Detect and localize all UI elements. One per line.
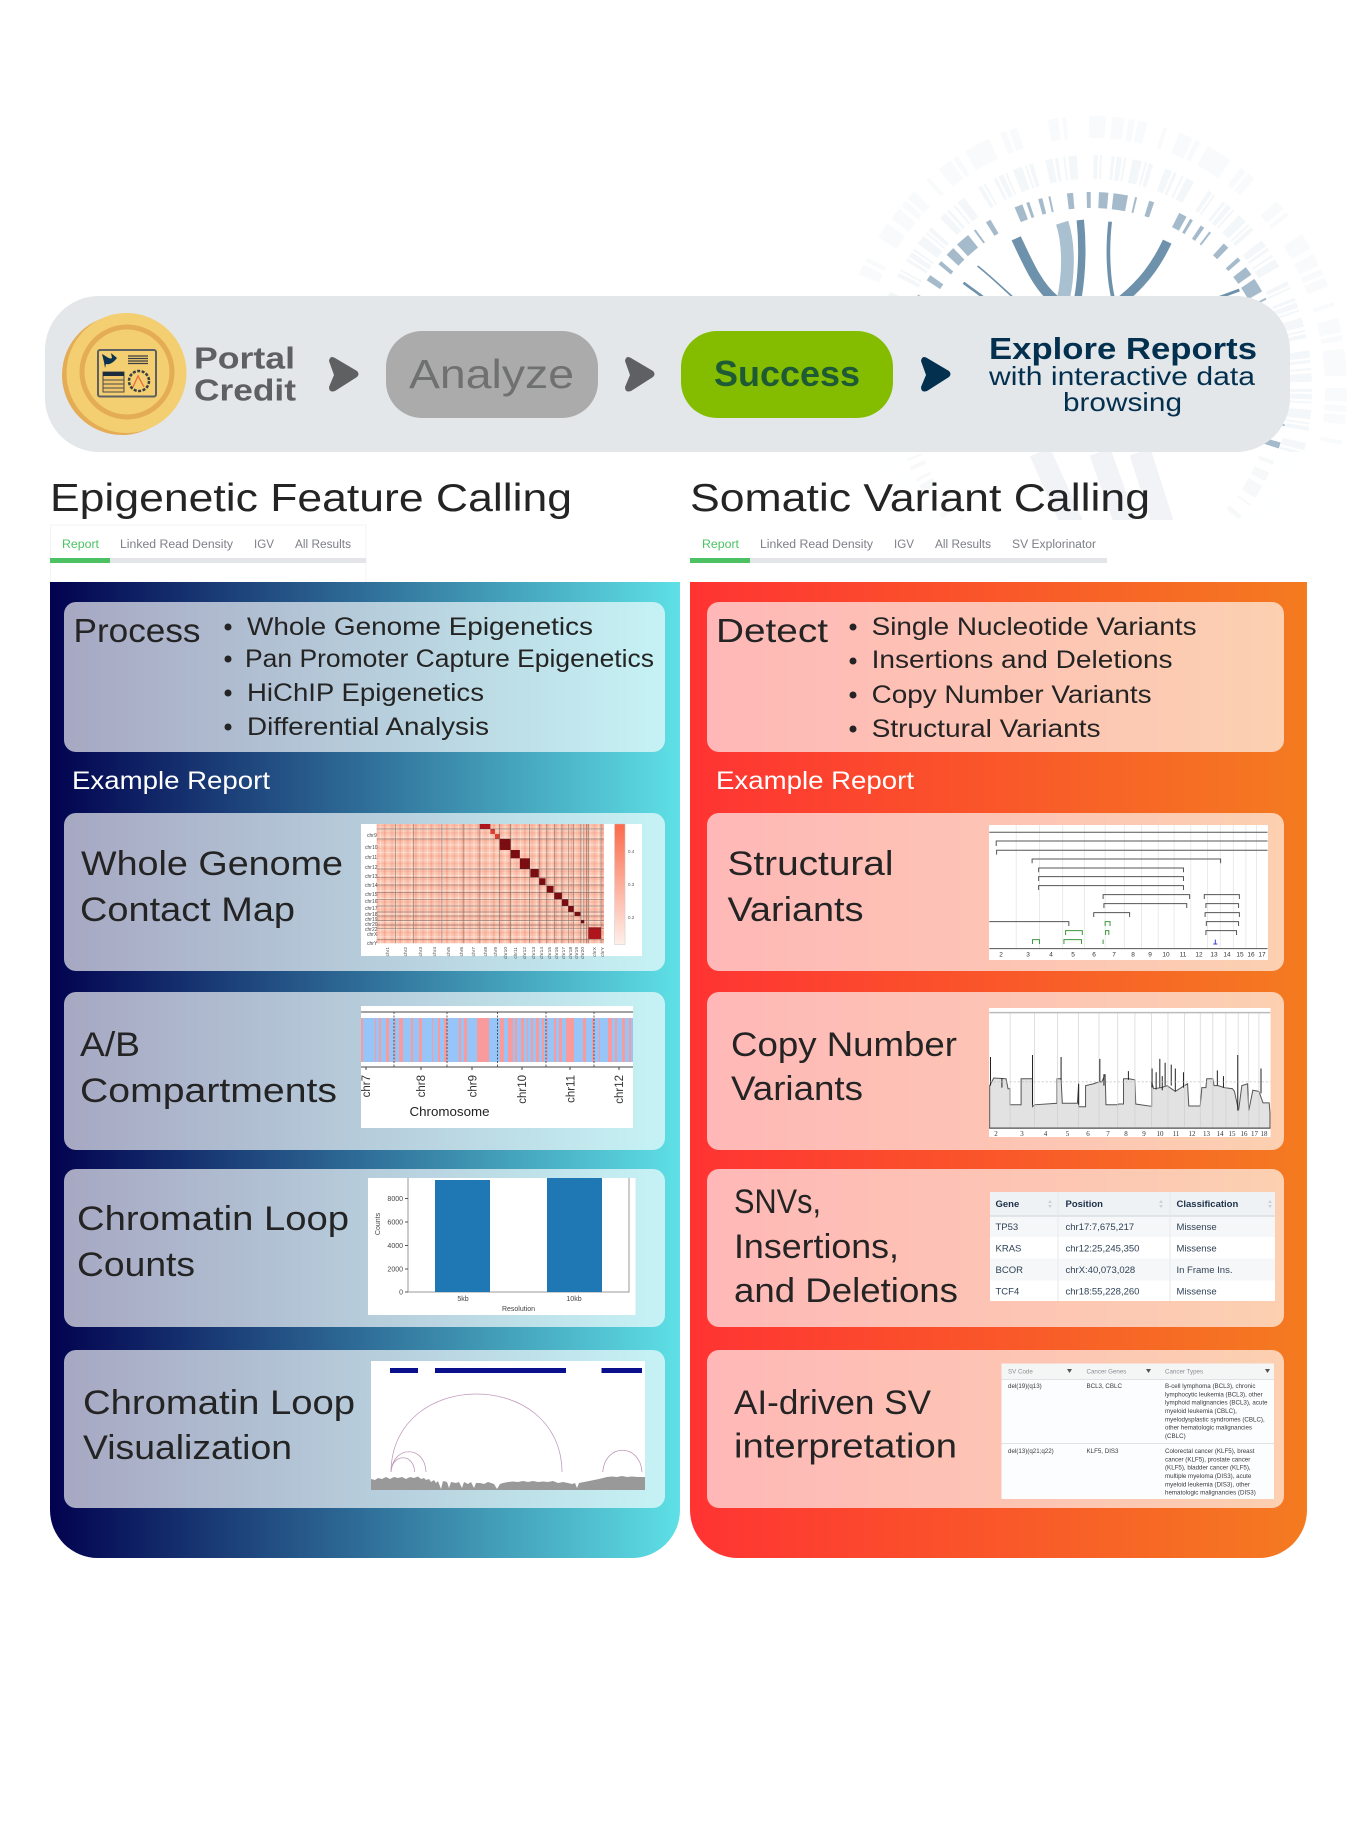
x-axis chromosome labels: chr19 (574, 947, 580, 959)
x-axis chromosome labels: chr1 (385, 947, 391, 956)
label: example report: Example Report (72, 767, 270, 795)
chart: contact map heatmap: chr11 (365, 855, 377, 861)
step: Success: Success (714, 353, 860, 394)
x-axis chromosome labels: chr16 (554, 947, 560, 959)
label: example report: Example Report (716, 767, 914, 795)
card: process (64, 602, 665, 752)
table: variants: chr18:55,228,260 (1066, 1286, 1139, 1298)
x-axis chromosome labels: chr14 (539, 947, 545, 959)
chart: loop count bars: 10kb (566, 1296, 582, 1303)
chart: structural variant brackets: 17 (1258, 952, 1266, 958)
card: process: HiChIP Epigenetics (247, 679, 484, 707)
table: SV interpretation: myeloid leukemia (CBLC), (1165, 1408, 1237, 1415)
chart: A/B compartment strip: Chromosome (410, 1104, 490, 1119)
table: SV interpretation: (KLF5), bladder cancer (KLF5), (1165, 1465, 1251, 1472)
chart: A/B compartment strip: chr12 (614, 1075, 626, 1104)
table: variants: chr17:7,675,217 (1066, 1222, 1134, 1233)
chart: copy number profile: 4 (1044, 1130, 1048, 1138)
x-axis chromosome labels (385, 946, 606, 959)
chart: contact map heatmap: chr15 (365, 892, 378, 898)
chart: loop count bars: 0 (399, 1290, 403, 1296)
x-axis chromosome labels: chr2 (403, 947, 409, 956)
chart: copy number profile: 18 (1260, 1130, 1268, 1138)
table: variants: Missense (1176, 1244, 1217, 1254)
tabs: somatic report: Linked Read Density (760, 539, 873, 551)
chart: copy number profile: 15 (1228, 1130, 1236, 1138)
chart: loop arcs (371, 1361, 645, 1490)
card: process: Whole Genome Epigenetics (247, 613, 593, 641)
chart: contact map heatmap: chrY (367, 941, 378, 947)
chart: structural variant brackets: 11 (1180, 952, 1187, 958)
chart: contact map heatmap: chr20 (365, 922, 378, 928)
tabs: somatic report: IGV (894, 539, 914, 551)
table: SV interpretation: myeloid leukemia (DIS3), other (1165, 1481, 1250, 1488)
table: SV interpretation: SV Code (1008, 1368, 1033, 1376)
card: detect: Detect (716, 612, 828, 649)
card: whole genome contact map: Contact Map (80, 891, 295, 929)
card: AI-driven SV interpretation (707, 1350, 1284, 1508)
chart: contact map heatmap: chr10 (365, 845, 378, 851)
fade below bar (690, 452, 1366, 582)
card: AI-driven SV interpretation: interpretation (734, 1428, 957, 1466)
label: Portal Credit: Portal (194, 340, 295, 376)
card: detect: Single Nucleotide Variants (872, 613, 1197, 641)
table: SV interpretation: hematologic malignancies (DIS3) (1165, 1490, 1256, 1497)
x-axis chromosome labels: chr11 (513, 947, 519, 959)
chart: copy number profile: 3 (1020, 1130, 1024, 1138)
chart: contact map heatmap: chrX (367, 932, 378, 938)
x-axis chromosome labels: chr17 (561, 947, 567, 959)
x-axis chromosome labels: chrX (592, 946, 598, 957)
chart: copy number profile: 14 (1216, 1130, 1224, 1138)
panel: epigenetic feature calling (50, 582, 680, 1558)
table: SV interpretation: Colorectal cancer (KLF5), breast (1165, 1448, 1255, 1455)
table: variants: TCF4 (996, 1286, 1019, 1298)
chart: copy number profile: 8 (1124, 1130, 1128, 1138)
card: copy number variants (707, 992, 1284, 1150)
table: variants: In Frame Ins. (1176, 1265, 1232, 1276)
chart: loop count bars: 5kb (457, 1296, 469, 1303)
table: SV interpretation: Cancer Types (1165, 1368, 1203, 1376)
card: whole genome contact map (64, 813, 665, 971)
chart: structural variant brackets: 3 (1026, 952, 1030, 958)
tabs: epigenetic report: All Results (295, 539, 351, 551)
chart: structural variant brackets: 12 (1195, 952, 1203, 958)
x-axis chromosome labels: chr10 (503, 947, 509, 959)
table: SV interpretation: multiple myeloma (DIS3), acute (1165, 1473, 1252, 1480)
table: variants: chr12:25,245,350 (1066, 1244, 1139, 1254)
table: variants: Gene (996, 1199, 1019, 1210)
x-axis chromosome labels: chr12 (522, 947, 528, 959)
table: variants: chrX:40,073,028 (1066, 1265, 1135, 1276)
chart: copy number profile: 11 (1173, 1130, 1180, 1138)
step: Analyze (386, 331, 598, 418)
text: Explore Reports (988, 331, 1257, 417)
card: A/B compartments: Compartments (80, 1072, 337, 1110)
chart: contact map heatmap: chr17 (365, 906, 378, 912)
table: variants: BCOR (996, 1265, 1023, 1276)
card: structural variants: Structural (728, 845, 894, 883)
arrow 2 (625, 357, 654, 392)
chart: structural variant brackets: 16 (1247, 952, 1255, 958)
card: SNVs, insertions and deletions: Insertions, (734, 1228, 899, 1266)
chart: loop count bars: Resolution (502, 1306, 535, 1313)
card: copy number variants: Variants (731, 1070, 863, 1108)
tabs: epigenetic report (50, 525, 366, 585)
card: detect (707, 602, 1284, 752)
chart: structural variant brackets: 13 (1210, 952, 1218, 958)
chart: contact map heatmap: chr13 (365, 874, 378, 880)
step: Success (681, 331, 893, 418)
card: SNVs, insertions and deletions: SNVs, (734, 1183, 821, 1221)
x-axis chromosome labels: chr15 (547, 947, 553, 959)
x-axis chromosome labels: chr4 (432, 947, 438, 956)
table: SV interpretation: other hematologic malignancies (1165, 1425, 1252, 1432)
card: SNVs, insertions and deletions (707, 1169, 1284, 1327)
tabs: epigenetic report: IGV (254, 539, 274, 551)
x-axis chromosome labels: chr3 (418, 947, 424, 956)
card: copy number variants: Copy Number (731, 1026, 957, 1064)
table: SV interpretation: cancer (KLF5), prostate cancer (1165, 1456, 1250, 1463)
card: chromatin loop visualization: Visualization (83, 1429, 292, 1467)
card: chromatin loop visualization: Chromatin Loop (83, 1384, 355, 1422)
tabs: epigenetic report: Linked Read Density (120, 539, 233, 551)
text: Explore Reports: Explore Reports (989, 331, 1257, 366)
heading: Epigenetic Feature Calling: Epigenetic Feature Calling (50, 477, 572, 520)
chart: contact map heatmap: chr12 (365, 865, 378, 871)
chord ribbons (964, 220, 1239, 300)
chart: contact map heatmap: chr19 (365, 917, 378, 923)
circos background graphic (690, 127, 1366, 651)
arrow 1 (329, 357, 358, 392)
chart: copy number profile: 6 (1086, 1130, 1090, 1138)
chart: copy number profile: 5 (1066, 1130, 1070, 1138)
table: SV interpretation (1002, 1364, 1274, 1499)
colorbar ticks: 0.2 (628, 915, 635, 920)
x-axis chromosome labels: chr20 (580, 947, 586, 959)
chart: loop count bars: 2000 (387, 1266, 403, 1274)
table: SV interpretation: del(19)(q13) (1008, 1383, 1042, 1390)
step: Analyze: Analyze (409, 351, 574, 397)
chart: structural variant brackets: 7 (1112, 952, 1116, 958)
table: SV interpretation: BCL3, CBLC (1086, 1383, 1122, 1390)
card: A/B compartments: A/B (80, 1026, 140, 1064)
text: Explore Reports: with interactive data (988, 361, 1256, 391)
chart: copy number profile: 17 (1251, 1130, 1258, 1138)
chart: loop count bars: 6000 (387, 1220, 403, 1226)
chart: structural variant brackets: 6 (1092, 952, 1096, 958)
card: AI-driven SV interpretation: AI-driven SV (734, 1384, 931, 1422)
card: detect: Insertions and Deletions (872, 646, 1173, 674)
x-axis chromosome labels: chr5 (446, 947, 452, 956)
card: structural variants: Variants (728, 891, 864, 929)
icon: portal credit coin (62, 313, 186, 435)
colorbar ticks (628, 849, 635, 920)
x-axis chromosome labels: chr13 (531, 947, 537, 959)
chart: structural variant brackets (989, 825, 1268, 960)
chart: copy number profile: 9 (1142, 1130, 1146, 1138)
chart: structural variant brackets: 2 (999, 952, 1003, 958)
chart: loop count bars: Counts (375, 1212, 382, 1235)
process flow bar (45, 296, 1290, 452)
x-axis chromosome labels: chr7 (471, 947, 477, 956)
heading: Somatic Variant Calling: Somatic Variant Calling (690, 477, 1150, 520)
chart: structural variant brackets: 4 (1049, 952, 1053, 958)
chart: copy number profile: 13 (1203, 1130, 1210, 1138)
card: chromatin loop counts (64, 1169, 665, 1327)
chart: copy number profile: 16 (1240, 1130, 1248, 1138)
chart: A/B compartment strip (361, 1006, 633, 1128)
card: chromatin loop visualization (64, 1350, 665, 1508)
chart: contact map heatmap: chr16 (365, 899, 378, 905)
tabs: somatic report: SV Explorinator (1012, 539, 1096, 551)
chart: copy number profile: 7 (1106, 1130, 1110, 1138)
card: SNVs, insertions and deletions: and Deletions (734, 1272, 958, 1310)
chart: loop count bars (368, 1178, 636, 1315)
chart: contact map heatmap: chr14 (365, 883, 378, 889)
card: detect: Structural Variants (872, 715, 1101, 743)
x-axis chromosome labels: chr9 (493, 947, 499, 956)
panel: somatic variant calling (690, 582, 1307, 1558)
chart: A/B compartment strip: chr8 (416, 1075, 428, 1097)
chart: A/B compartment strip: chr9 (468, 1075, 480, 1097)
text: Explore Reports: browsing (1063, 387, 1182, 417)
label: Portal Credit: Credit (194, 372, 296, 408)
tabs: epigenetic report: Report (62, 539, 100, 551)
card: process: Pan Promoter Capture Epigenetics (245, 645, 654, 673)
colorbar ticks: 0.3 (628, 882, 635, 887)
table: variants (990, 1192, 1275, 1301)
table: SV interpretation: B-cell lymphoma (BCL3), chronic (1165, 1383, 1255, 1390)
table: variants: Missense (1176, 1222, 1217, 1233)
card: whole genome contact map: Whole Genome (81, 845, 343, 883)
x-axis chromosome labels: chr8 (483, 947, 489, 956)
card: process: Process (74, 612, 200, 649)
card: process: Differential Analysis (247, 713, 489, 741)
table: variants: Classification (1176, 1199, 1238, 1210)
chart: structural variant brackets: 10 (1162, 952, 1170, 958)
chart: loop count bars: 8000 (387, 1196, 403, 1203)
chart: A/B compartment strip: chr10 (517, 1075, 529, 1104)
card: A/B compartments (64, 992, 665, 1150)
chart: loop count bars: 4000 (387, 1243, 403, 1250)
chart: structural variant brackets: 14 (1223, 952, 1231, 958)
table: variants: Missense (1176, 1286, 1217, 1298)
tabs: somatic report: All Results (935, 539, 991, 551)
table: variants: TP53 (996, 1222, 1018, 1233)
card: chromatin loop counts: Counts (77, 1246, 195, 1284)
label: Portal Credit (194, 340, 296, 408)
x-axis chromosome labels: chr6 (459, 947, 465, 956)
table: variants: Position (1066, 1199, 1103, 1210)
table: SV interpretation: Cancer Genes (1086, 1368, 1126, 1376)
colorbar ticks: 0.4 (628, 849, 635, 854)
table: SV interpretation: lymphoid malignancies (BCL3), acute (1165, 1400, 1268, 1407)
card: chromatin loop counts: Chromatin Loop (77, 1200, 349, 1238)
chart: contact map heatmap: chr9 (367, 833, 377, 839)
table: SV interpretation: lymphocytic leukemia (BCL3), other (1165, 1391, 1263, 1398)
chart: contact map heatmap (361, 824, 642, 959)
chart: contact map heatmap: chr18 (365, 912, 378, 918)
chart: A/B compartment strip: chr11 (566, 1075, 578, 1103)
chart: A/B compartment strip: chr7 (361, 1075, 373, 1097)
table: variants: KRAS (996, 1244, 1021, 1254)
chart: contact map heatmap: chr22 (365, 927, 378, 933)
chart: copy number profile: 12 (1188, 1130, 1196, 1138)
x-axis chromosome labels: chr18 (568, 947, 574, 959)
chart: structural variant brackets: 5 (1071, 952, 1075, 958)
chart: structural variant brackets: 9 (1148, 952, 1152, 958)
table: SV interpretation: KLF5, DIS3 (1086, 1448, 1119, 1455)
table: SV interpretation: del(13)(q21;q22) (1008, 1448, 1054, 1455)
tabs: somatic report: Report (702, 539, 740, 551)
x-axis chromosome labels: chrY (600, 946, 606, 957)
chart: copy number profile (989, 1008, 1271, 1138)
table: SV interpretation: myelodysplastic syndromes (CBLC), (1165, 1416, 1265, 1423)
card: structural variants (707, 813, 1284, 971)
card: detect: Copy Number Variants (872, 681, 1152, 709)
chart: copy number profile: 2 (994, 1130, 998, 1138)
chart: structural variant brackets: 15 (1236, 952, 1244, 958)
tabs: somatic report (690, 520, 1307, 585)
arrow 3 (921, 357, 950, 392)
table: SV interpretation: (CBLC) (1165, 1433, 1186, 1440)
chart: copy number profile: 10 (1156, 1130, 1164, 1138)
chart: structural variant brackets: 8 (1131, 952, 1135, 958)
